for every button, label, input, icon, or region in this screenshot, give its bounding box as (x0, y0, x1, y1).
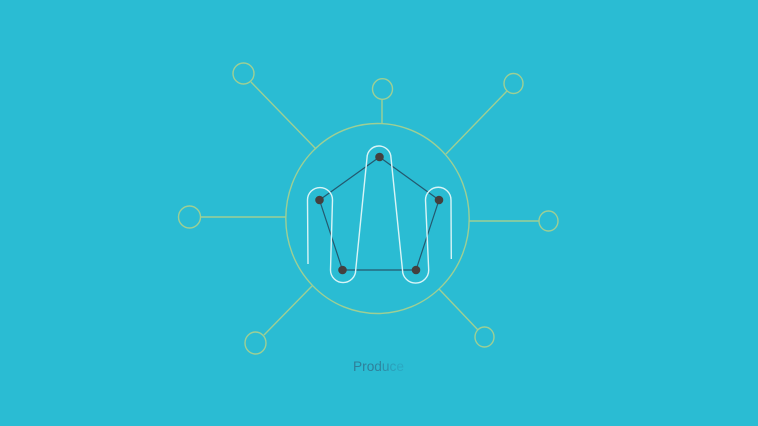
pentagon dots (315, 153, 443, 274)
node: right (469, 211, 558, 231)
node: top right (446, 74, 523, 154)
label: Produce: Produce (353, 358, 404, 374)
node: top (372, 79, 392, 124)
node: top left (233, 63, 316, 149)
node: bottom right (439, 289, 494, 347)
central circle (286, 124, 469, 314)
node: bottom left (245, 286, 312, 354)
pentagon outline (320, 157, 439, 270)
white winding line (308, 146, 451, 283)
node: left (178, 206, 286, 228)
